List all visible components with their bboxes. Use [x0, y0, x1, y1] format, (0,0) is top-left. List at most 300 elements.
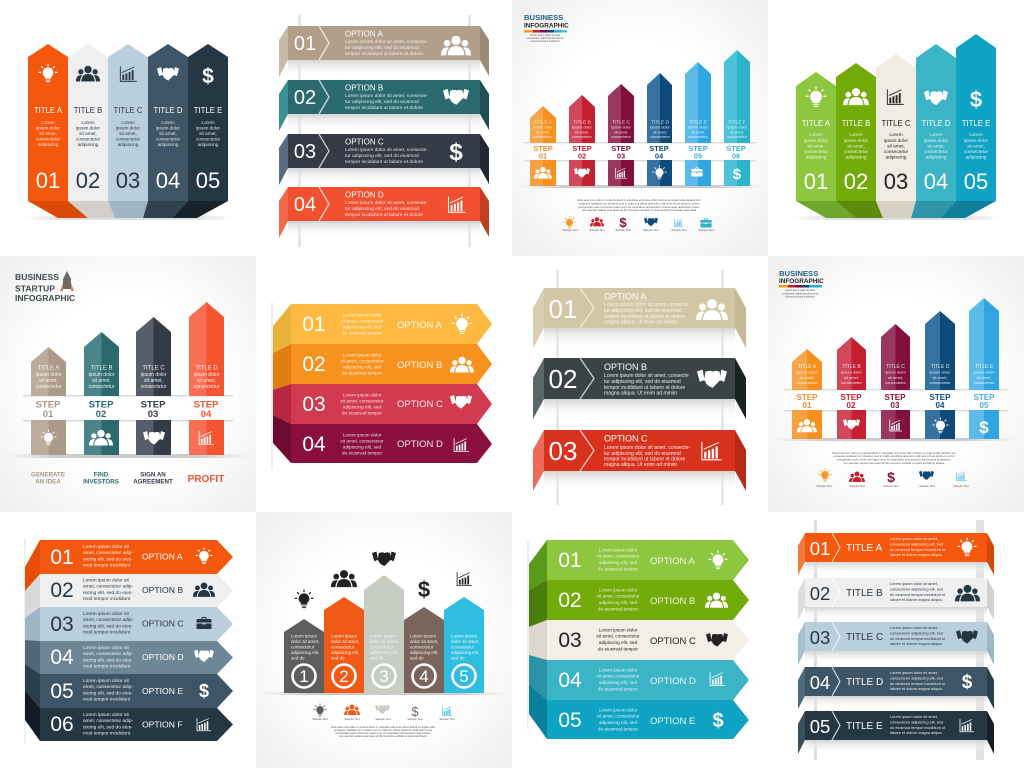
ribbon B: magna aliqua. Ut enim ad minim	[604, 390, 677, 396]
arrow B: STEP	[89, 400, 114, 410]
column A text	[802, 119, 831, 194]
column D text: TITLE D	[921, 119, 951, 128]
arrow 5: STEP	[974, 393, 995, 402]
band 05: sit amet, consectetur	[596, 714, 640, 718]
column D text	[153, 106, 183, 193]
band 01: Lorem ipsum dolor	[343, 312, 382, 318]
arrow 5: TITLE E	[975, 364, 994, 370]
arrow 1: sit amet,	[799, 375, 815, 380]
ribbon E: labore et dolore magna aliqua.	[890, 730, 943, 735]
band 04	[547, 660, 749, 700]
ribbon B	[533, 358, 746, 419]
ribbon D: 04	[294, 194, 316, 216]
band 03: 03	[302, 393, 326, 416]
icon: bulb	[806, 87, 826, 107]
band 03: OPTION C	[650, 636, 696, 647]
column C text: TITLE C	[881, 119, 911, 128]
band 01: isicing elit, sed do eius-	[83, 556, 133, 562]
band 02: adipiscing elit, sed	[599, 600, 638, 605]
arrow 6: $	[733, 166, 742, 183]
arrow 4: STEP	[930, 393, 951, 402]
header: business infographic: eiusmod tempor incididunt	[530, 40, 560, 43]
column D text: adipiscing	[926, 154, 947, 160]
ribbon A: OPTION A	[604, 292, 647, 302]
arrow 3	[608, 84, 634, 186]
header: business infographic	[779, 269, 824, 298]
ribbon C	[533, 430, 746, 491]
ribbon A: 01	[549, 294, 577, 324]
paragraph: perspiciatis unde omnis iste natus error sit voluptatem accusantium doloremque	[336, 731, 431, 735]
column C text: sit amet,	[119, 131, 137, 136]
band 02: OPTION B	[397, 360, 442, 371]
arrow D: TITLE D	[195, 366, 218, 372]
arrow 2: TITLE B	[573, 120, 591, 126]
panel: six step rising arrows	[518, 13, 762, 232]
legend row: Sample Text	[562, 228, 578, 232]
band 04: sit amet, consectetur	[340, 438, 384, 444]
panel: five vertical arrows green to teal	[790, 34, 1003, 220]
ribbon D: Lorem ipsum dolor sit amet,	[890, 670, 938, 675]
legend row: Sample Text	[589, 228, 605, 232]
column C text: Lorem	[889, 132, 903, 137]
legend row: Sample Text	[312, 717, 328, 721]
column 2: consectetur	[331, 644, 355, 650]
column D text: 04	[924, 169, 948, 194]
ribbon B: tur adipiscing elit, sed do eiusmod	[604, 379, 681, 385]
column E text: ipsum dolor	[196, 126, 221, 130]
column C text: consectetur	[116, 136, 141, 142]
icon: people	[843, 88, 869, 105]
header: business infographic: INFOGRAPHIC	[524, 22, 569, 30]
ribbon D: do eiusmod tempor incididunt ut	[890, 681, 946, 686]
column 5	[451, 634, 479, 688]
band 01: adipiscing elit, sed	[343, 324, 382, 330]
band 04: OPTION D	[650, 676, 696, 687]
paragraph: perspiciatis unde omnis iste natus error sit voluptatem accusantium doloremque laudantium	[837, 458, 951, 462]
arrow A: STEP	[36, 400, 61, 410]
column D text	[921, 119, 951, 194]
column 3: adipiscing elit,	[370, 650, 398, 655]
arrow 4: consectetur	[930, 380, 951, 385]
column B text	[74, 106, 102, 193]
arrow A	[31, 347, 66, 486]
column 5: consectetur	[451, 644, 475, 650]
band 03: 03	[558, 629, 582, 652]
column B text	[842, 119, 870, 194]
ribbon D: 04	[810, 672, 830, 693]
band 03: do eiusmod tempor	[598, 646, 638, 652]
arrow 4	[647, 73, 672, 186]
ribbon E: do eiusmod tempor incididunt ut	[890, 725, 946, 730]
panel: five vertical arrows orange to navy	[22, 44, 235, 220]
icon: dollar: $	[418, 577, 430, 602]
column C text: adipiscing	[886, 154, 907, 160]
column 2: adipiscing elit,	[331, 650, 359, 655]
column C text: adipiscing	[118, 142, 139, 147]
band 03: sit amet, consectetur	[596, 634, 640, 638]
band 04: Lorem ipsum dolor	[599, 668, 638, 672]
arrow 3: 03	[891, 401, 900, 410]
arrow 3	[881, 324, 910, 439]
column 4: dolor sit amet,	[410, 639, 438, 644]
icon: bulb	[39, 64, 57, 82]
column D text: sit amet,	[927, 144, 945, 148]
column A text: consectetur	[36, 136, 61, 142]
arrow 3: consectetur	[885, 380, 907, 385]
band 04: 04	[558, 669, 582, 692]
band 02: amet, consectetur adip-	[83, 584, 134, 590]
band 02: Lorem ipsum dolor	[599, 588, 638, 592]
band 01: do eiusmod tempor	[342, 330, 382, 336]
column D text: adipiscing	[158, 142, 179, 147]
column 3: sed do	[370, 656, 384, 660]
arrow 4: sit amet,	[653, 130, 667, 134]
icon: chart	[887, 90, 904, 105]
background tile: top third	[512, 0, 768, 256]
legend row	[312, 703, 455, 721]
band 03	[40, 607, 233, 641]
column 1: 1	[299, 667, 309, 686]
arrow 5: 05	[980, 401, 989, 410]
column E text: adipiscing	[198, 142, 219, 147]
band 02	[40, 574, 233, 607]
icon: rocket	[60, 271, 74, 291]
header: business infographic: INFOGRAPHIC	[779, 278, 824, 285]
arrow 3: TITLE C	[886, 364, 905, 370]
ribbon B: tempor incididunt ut labore et dolore	[345, 105, 423, 111]
column 1	[291, 634, 319, 688]
column B text: ipsum dolor	[76, 126, 101, 130]
band 01: Lorem ipsum dolor sit	[83, 544, 130, 550]
column 1: sed do	[291, 656, 305, 660]
column B text: 02	[76, 168, 100, 193]
ribbon C: 03	[294, 141, 316, 163]
arrow D: 04	[201, 409, 212, 420]
column E text: TITLE E	[194, 106, 222, 115]
panel: five ribbons title A to E	[798, 520, 994, 760]
band 06: mod tempor incididunt	[83, 730, 131, 736]
band 05: isicing elit, sed do eius-	[83, 690, 133, 696]
arrow 3: TITLE C	[612, 120, 630, 126]
arrow 5: sit amet,	[976, 375, 992, 380]
panel: five house arrows with numbered circles	[260, 552, 505, 738]
ribbon D: OPTION D	[345, 190, 384, 200]
band 05	[547, 700, 749, 739]
arrow 5	[685, 62, 711, 186]
arrow 6: sit amet,	[730, 130, 744, 134]
arrow D: PROFIT	[188, 474, 224, 485]
arrow 2: consectetur	[572, 135, 593, 139]
ribbon E: 05	[810, 716, 830, 737]
ribbon D	[798, 667, 994, 709]
legend row	[562, 215, 714, 232]
ribbon A: labore et dolore magna aliqua.	[890, 552, 943, 557]
header: business infographic: consectetur adipiscing elit sed do	[527, 37, 564, 40]
column A text: adipiscing	[806, 154, 827, 160]
column A text: 01	[804, 169, 828, 194]
arrow 2: sit amet,	[844, 375, 859, 380]
paragraph: rem aperiam eaque ipsa quae ab illo inventore veritatis et quasi architecto beatae vitae dicta	[582, 208, 696, 212]
band 04: 04	[302, 433, 326, 456]
arrow C: 03	[148, 409, 158, 420]
arrow 6: ipsum dolor	[727, 126, 748, 130]
arrow 5: STEP	[688, 144, 708, 153]
band 02: 02	[50, 579, 74, 602]
arrow 4: sit amet,	[932, 375, 948, 380]
ribbon D: Lorem ipsum dolor sit amet, consecte-	[345, 200, 428, 206]
ribbon B: tur adipiscing elit, sed do eiusmod	[345, 99, 419, 105]
paragraph: Duis aute irure dolor in reprehenderit in voluptate velit esse cillum dolore eu fugiat nulla pariatur sint	[832, 451, 956, 455]
column A text: ipsum dolor	[804, 138, 829, 143]
ribbon B: 02	[549, 364, 577, 394]
arrow A: TITLE A	[38, 366, 59, 372]
arrow 1: TITLE A	[798, 364, 817, 370]
column 2: sed do	[331, 656, 345, 660]
column 5: 5	[459, 667, 469, 686]
band 04: sit amet, consectetur	[596, 674, 640, 678]
band 04: mod tempor incididunt	[83, 664, 131, 670]
column 1: adipiscing elit,	[291, 650, 319, 655]
column A text: Lorem	[41, 120, 55, 125]
band 05: 05	[558, 709, 582, 732]
band 01: 01	[50, 546, 74, 569]
ribbon E: consectetur adipiscing elit, sed	[890, 720, 943, 724]
band 05: $	[712, 710, 724, 732]
header: business infographic: BUSINESS	[779, 269, 818, 278]
arrow 1: 01	[803, 401, 812, 410]
arrow 1	[530, 106, 556, 186]
arrow B	[83, 332, 119, 486]
arrow 3: 03	[617, 152, 625, 160]
column C text: ipsum dolor	[884, 138, 909, 143]
legend row: Sample Text	[439, 717, 455, 721]
column C text: 03	[116, 168, 140, 193]
arrow 2	[569, 95, 595, 186]
column A text: Lorem	[809, 132, 823, 137]
background tile: bottom second	[256, 512, 512, 768]
ribbon C	[798, 622, 994, 665]
arrow 5: 05	[694, 152, 702, 160]
arrow 2: ipsum dolor	[841, 370, 862, 374]
ribbon C: consectetur adipiscing elit, sed	[890, 630, 943, 636]
arrow 2: 02	[847, 401, 856, 410]
band 03: OPTION C	[397, 399, 443, 410]
column 3: consectetur	[370, 644, 394, 650]
ribbon C: OPTION C	[345, 138, 384, 146]
column E text: adipiscing	[966, 154, 987, 160]
arrow C: sit amet,	[144, 378, 163, 384]
arrow 5: consectetur	[688, 135, 709, 139]
band 01: OPTION A	[142, 552, 183, 562]
band 04: isicing elit, sed do eius-	[83, 657, 133, 663]
band 01	[547, 540, 749, 580]
arrow 6: consectetur	[727, 135, 748, 139]
header: business infographic	[524, 13, 569, 43]
arrow A: AN IDEA	[35, 478, 61, 486]
arrow 1: STEP	[797, 393, 818, 402]
band 02: sit amet, consectetur	[340, 358, 384, 364]
arrow 5: TITLE E	[689, 120, 707, 126]
legend row: Sample Text	[816, 484, 832, 488]
band 03: Lorem ipsum dolor	[343, 392, 382, 398]
ribbon C: OPTION C	[604, 434, 648, 444]
column B text: adipiscing	[78, 142, 99, 147]
band 05: adipiscing elit, sed	[599, 720, 638, 725]
ribbon A: tempor incididunt ut labore et dolore	[604, 314, 685, 320]
ribbon C: Lorem ipsum dolor sit amet, consecte-	[604, 445, 691, 451]
icon: dollar: $	[970, 87, 982, 112]
band 03: OPTION C	[142, 618, 184, 628]
column E text: sit amet,	[967, 144, 985, 148]
arrow 1: sit amet,	[536, 130, 550, 134]
column E text: Lorem	[969, 132, 983, 137]
column D text: ipsum dolor	[156, 126, 181, 130]
column 3: 3	[379, 667, 389, 686]
column 5: Lorem ipsum	[451, 634, 477, 638]
column 1: dolor sit amet,	[291, 639, 319, 644]
icon: bulb	[295, 590, 313, 608]
panel: three large ribbons	[533, 270, 746, 505]
ribbon A: Lorem ipsum dolor sit amet, consecte	[604, 302, 689, 308]
ribbon A: 01	[810, 538, 830, 559]
band 02: isicing elit, sed do eius-	[83, 590, 133, 596]
arrow 2: sit amet,	[575, 130, 589, 134]
paragraph: rem aperiam eaque ipsa quae ab illo inventore veritatis et quasi architecto beatae	[844, 461, 945, 465]
arrow D: STEP	[194, 400, 219, 410]
column D text: sit amet,	[159, 131, 177, 136]
arrow 6: TITLE F	[728, 120, 746, 126]
column A text: adipiscing	[38, 142, 59, 147]
band 04: OPTION D	[397, 439, 443, 450]
arrow 4: consectetur	[650, 135, 671, 139]
ribbon C: magna aliqua. Ut enim ad minim	[604, 462, 677, 468]
band 03: amet, consectetur adip-	[83, 617, 134, 623]
arrow C: consectetur	[141, 384, 167, 390]
band 02: 02	[302, 353, 326, 376]
arrow 6: 06	[732, 152, 740, 160]
band 05: $	[199, 681, 209, 701]
arrow 4: ipsum dolor	[650, 126, 671, 130]
band 02: do eiusmod tempor	[598, 606, 638, 612]
paragraph: occaecat cupidatat non proident sunt in culpa qui officia deserunt mollit anim id est	[334, 728, 432, 732]
ribbon C: do eiusmod tempor incididunt ut	[890, 636, 946, 641]
band 05: OPTION E	[650, 716, 695, 727]
arrow 5: ipsum dolor	[974, 370, 995, 374]
column B text: Lorem	[849, 132, 863, 137]
header: business infographic: consectetur adipiscing elit sed do	[782, 292, 819, 296]
ribbon D: tempor incididunt ut labore et dolore	[345, 212, 423, 218]
band 03: adipiscing elit, sed	[599, 640, 638, 645]
band 02: mod tempor incididunt	[83, 596, 131, 602]
band 03: sit amet, consectetur	[340, 398, 384, 404]
column 3: dolor sit amet,	[370, 639, 398, 644]
arrow 4: TITLE D	[931, 364, 950, 370]
paragraph: perspiciatis unde omnis iste natus error sit voluptatem accusantium doloremque laudantium totam	[579, 205, 700, 209]
icon: handshake	[372, 552, 396, 566]
column 3: Lorem ipsum	[370, 634, 396, 638]
column A text: 01	[36, 168, 60, 193]
band 03: do eiusmod tempor	[342, 410, 382, 416]
ribbon B: 02	[294, 87, 316, 109]
band 01: sit amet, consectetur	[340, 318, 384, 324]
band 04	[291, 424, 492, 463]
arrow B: consectetur	[89, 384, 115, 390]
icon: chart	[120, 66, 137, 82]
header: business infographic: BUSINESS	[524, 13, 563, 22]
arrow 5: sit amet,	[691, 130, 705, 134]
band 02	[547, 580, 749, 620]
paragraph: occaecat cupidatat non proident sunt in culpa qui officia deserunt mollit anim id est laborum sed ut	[578, 202, 700, 206]
band 02	[291, 344, 492, 384]
ribbon A: tempor incididunt ut labore et dolore	[345, 51, 423, 57]
column E text	[194, 106, 222, 193]
arrow A: consectetur	[36, 384, 62, 390]
band 04: do eiusmod tempor	[342, 450, 382, 456]
arrow 2: STEP	[572, 144, 592, 153]
heading: STARTUP	[15, 284, 55, 294]
arrow B: sit amet,	[92, 378, 111, 384]
column E text	[962, 119, 990, 194]
band 03: 03	[50, 613, 74, 636]
arrow 4: 04	[655, 152, 664, 160]
column C text: ipsum dolor	[116, 126, 141, 130]
column C text: 03	[884, 169, 908, 194]
band 02: 02	[558, 589, 582, 612]
legend row: $	[619, 215, 627, 230]
band 04: do eiusmod tempor	[598, 686, 638, 692]
legend row: Sample Text	[671, 228, 687, 232]
arrow D: sit amet,	[197, 378, 216, 384]
arrow B: TITLE B	[90, 366, 113, 372]
band 01: 01	[558, 549, 582, 572]
arrow 4: STEP	[649, 144, 669, 153]
ribbon A	[798, 533, 994, 575]
band 02: OPTION B	[650, 596, 695, 607]
band 01: do eiusmod tempor	[598, 566, 638, 572]
arrow C: TITLE C	[142, 366, 165, 372]
band 02: OPTION B	[142, 585, 183, 595]
ribbon C: TITLE C	[846, 632, 883, 643]
column C text	[881, 119, 911, 194]
column B text: 02	[844, 169, 868, 194]
arrow C	[133, 317, 173, 486]
arrow 5: consectetur	[974, 380, 995, 385]
arrow 1: consectetur	[797, 380, 818, 385]
column A text: ipsum dolor	[36, 126, 61, 130]
ribbon B: OPTION B	[345, 84, 383, 92]
column 1: Lorem ipsum	[291, 634, 317, 638]
ribbon C: Lorem ipsum dolor sit amet, consecte-	[345, 147, 428, 153]
ribbon B: 02	[810, 583, 830, 604]
band 01: amet, consectetur adip-	[83, 550, 134, 556]
ribbon C: tur adipiscing elit, sed do eiusmod	[345, 153, 419, 159]
ribbon A: tur adipiscing elit, sed do eiusmod	[604, 308, 681, 314]
column A text: sit amet,	[807, 144, 825, 148]
band 02: do eiusmod tempor	[342, 370, 382, 376]
background tile: middle right	[768, 256, 1024, 512]
legend row: Sample Text	[849, 484, 865, 488]
legend row: Sample Text	[615, 228, 631, 232]
column A text: TITLE A	[802, 119, 831, 128]
ribbon A: Lorem ipsum dolor sit amet, consecte-	[345, 39, 428, 45]
paragraph: Duis aute irure dolor in reprehenderit in voluptate velit esse cillum dolore eu fugiat nulla	[331, 725, 435, 729]
column E text: TITLE E	[962, 119, 990, 128]
arrow 2: TITLE B	[842, 364, 861, 370]
arrow D: ipsum dolor	[194, 372, 220, 378]
band 02: Lorem ipsum dolor sit	[83, 578, 130, 584]
column D text: 04	[156, 168, 180, 193]
ribbon B	[279, 80, 489, 131]
